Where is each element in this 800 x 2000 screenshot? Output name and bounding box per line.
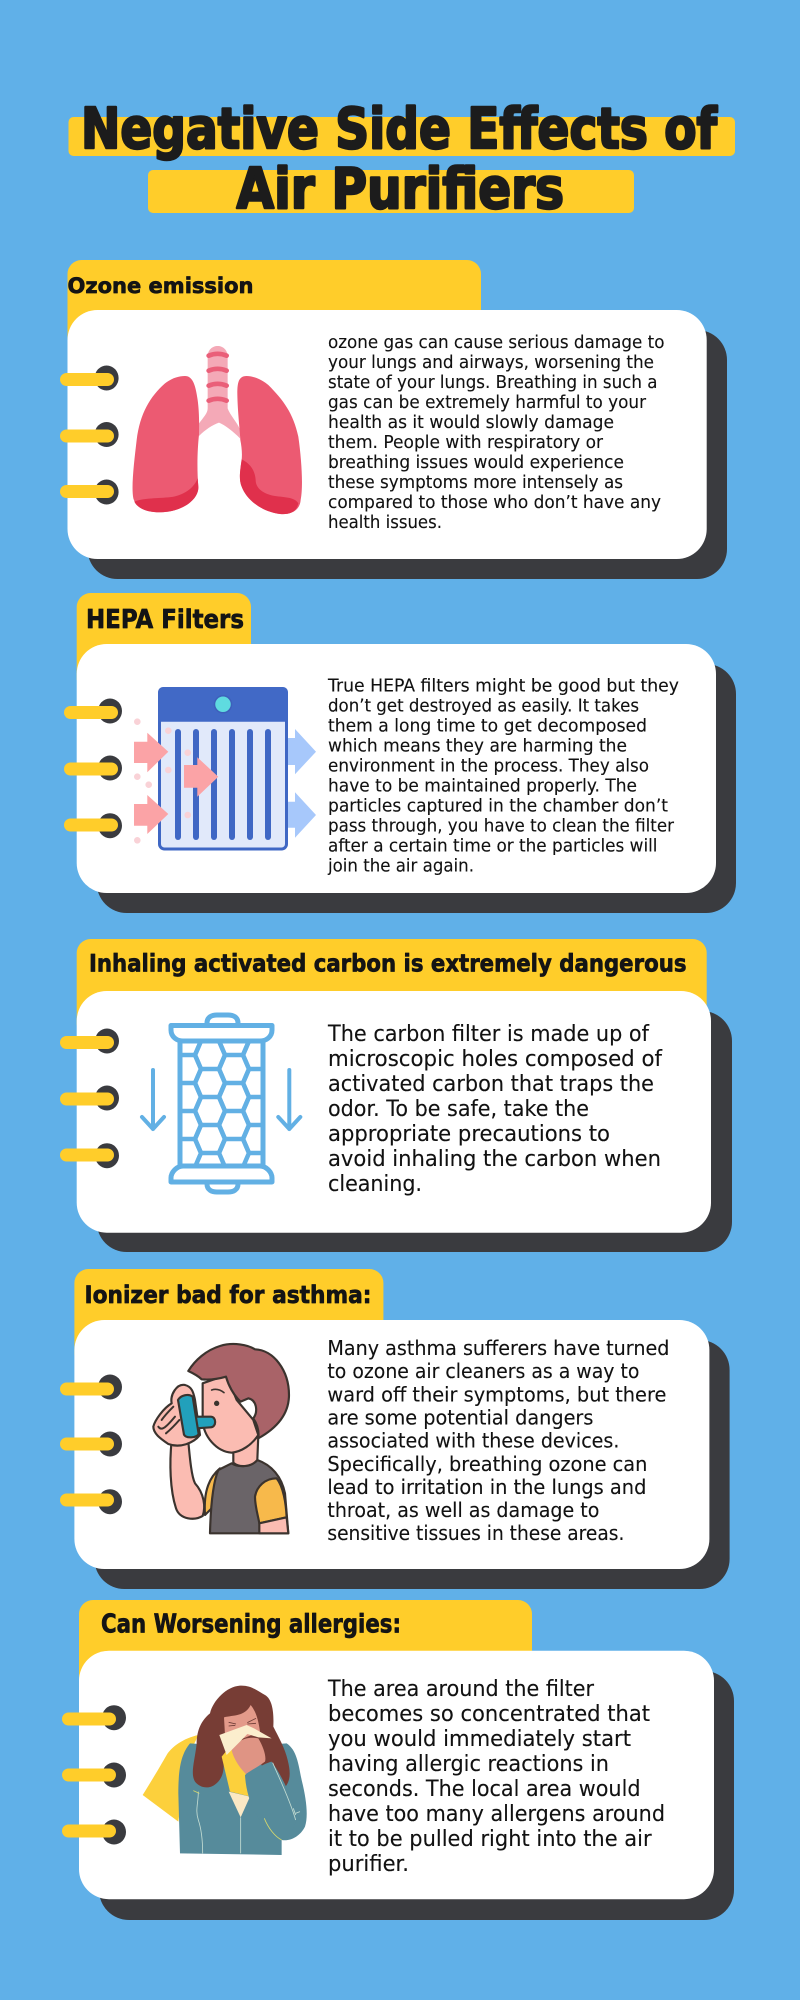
tab: ionizer heading: Ionizer bad for asthma: bbox=[84, 1281, 372, 1309]
tab: allergies heading: Can Worsening allergies: bbox=[101, 1610, 401, 1640]
text: ozone description: health issues. bbox=[328, 513, 442, 533]
text: allergies description: The area around the filter bbox=[327, 1677, 595, 1702]
text: ozone description bbox=[328, 333, 664, 533]
text: HEPA description: after a certain time or the particles will bbox=[328, 836, 658, 856]
text: asthma description: lead to irritation in the lungs and bbox=[327, 1475, 646, 1499]
text: HEPA description: have to be maintained properly. The bbox=[328, 776, 637, 796]
arrow: left downward flow bbox=[142, 1070, 164, 1129]
text: HEPA description: them a long time to get decomposed bbox=[328, 716, 647, 736]
text: asthma description: to ozone air cleaners as a way to bbox=[327, 1359, 639, 1383]
tab: ozone emission heading: Ozone emission bbox=[68, 274, 254, 298]
spiral binding rings bbox=[64, 698, 122, 838]
text: carbon description: appropriate precautions to bbox=[328, 1122, 610, 1147]
icon: lungs bbox=[133, 346, 302, 514]
title: Air Purifiers bbox=[236, 157, 564, 222]
text: asthma description: sensitive tissues in these areas. bbox=[327, 1521, 624, 1545]
text: carbon description: activated carbon that traps the bbox=[328, 1072, 654, 1097]
tab: allergies heading bbox=[79, 1600, 532, 1685]
tab: activated carbon heading bbox=[77, 939, 707, 1025]
text: ozone description: state of your lungs. Breathing in such a bbox=[328, 373, 658, 393]
arrow: right downward flow bbox=[278, 1070, 300, 1129]
text: HEPA description: particles captured in the chamber don’t bbox=[328, 796, 668, 816]
panel: worsening allergies bbox=[62, 1600, 734, 1920]
spiral binding rings bbox=[62, 1705, 126, 1844]
title bbox=[68, 97, 735, 222]
text: asthma description: ward off their symptoms, but there bbox=[327, 1382, 666, 1406]
text: carbon description: The carbon filter is made up of bbox=[327, 1022, 650, 1047]
text: HEPA description: environment in the process. They also bbox=[328, 756, 649, 776]
text: asthma description: associated with these devices. bbox=[327, 1429, 619, 1453]
text: allergies description: have too many allergens around bbox=[328, 1802, 665, 1827]
text: allergies description: having allergic reactions in bbox=[328, 1752, 609, 1777]
text: ozone description: them. People with respiratory or bbox=[328, 433, 604, 453]
icon: person using inhaler bbox=[153, 1344, 289, 1533]
tab: activated carbon heading: Inhaling activated carbon is extremely dangerous bbox=[89, 950, 686, 978]
text: asthma description: throat, as well as damage to bbox=[327, 1498, 599, 1522]
tab: HEPA filters heading: HEPA Filters bbox=[86, 605, 244, 635]
tab: HEPA filters heading bbox=[77, 593, 251, 680]
text: allergies description: you would immediately start bbox=[328, 1727, 631, 1752]
panel: HEPA filters bbox=[64, 593, 736, 913]
text: ozone description: your lungs and airways, worsening the bbox=[328, 353, 654, 373]
panel: ionizer and asthma bbox=[60, 1269, 730, 1589]
text: carbon description bbox=[327, 1022, 663, 1197]
text: ozone description: compared to those who don’t have any bbox=[328, 493, 661, 513]
text: carbon description: odor. To be safe, take the bbox=[328, 1097, 589, 1122]
text: HEPA description: which means they are harming the bbox=[328, 736, 627, 756]
text: allergies description: becomes so concentrated that bbox=[328, 1702, 650, 1727]
text: HEPA description: join the air again. bbox=[327, 856, 474, 876]
spiral binding rings bbox=[60, 1028, 119, 1168]
text: carbon description: cleaning. bbox=[328, 1172, 422, 1197]
tab: ozone emission heading bbox=[68, 260, 481, 345]
spiral binding rings bbox=[60, 1374, 122, 1514]
text: asthma description bbox=[327, 1336, 669, 1545]
text: asthma description: are some potential dangers bbox=[327, 1406, 593, 1430]
text: ozone description: gas can be extremely harmful to your bbox=[328, 393, 647, 413]
spiral binding rings bbox=[60, 366, 119, 504]
tab: ionizer heading bbox=[74, 1269, 383, 1355]
panel: activated carbon bbox=[60, 939, 732, 1252]
text: HEPA description: True HEPA filters might be good but they bbox=[327, 676, 679, 696]
icon: woman sneezing into tissue bbox=[143, 1686, 307, 1855]
text: ozone description: these symptoms more intensely as bbox=[328, 473, 623, 493]
text: allergies description: seconds. The local area would bbox=[328, 1777, 640, 1802]
panel: ozone emission bbox=[60, 260, 727, 579]
icon: HEPA filter with air flow arrows bbox=[134, 687, 316, 849]
text: HEPA description: don’t get destroyed as easily. It takes bbox=[328, 696, 639, 716]
text: ozone description: ozone gas can cause serious damage to bbox=[328, 333, 664, 353]
text: asthma description: Many asthma sufferers have turned bbox=[327, 1336, 669, 1360]
text: HEPA description: pass through, you have to clean the filter bbox=[328, 816, 675, 836]
text: allergies description bbox=[327, 1677, 665, 1877]
text: carbon description: avoid inhaling the carbon when bbox=[328, 1147, 661, 1172]
text: ozone description: health as it would slowly damage bbox=[328, 413, 614, 433]
text: allergies description: purifier. bbox=[328, 1852, 409, 1877]
text: carbon description: microscopic holes composed of bbox=[328, 1047, 663, 1072]
text: HEPA description bbox=[327, 676, 679, 876]
text: allergies description: it to be pulled right into the air bbox=[328, 1827, 652, 1852]
icon: activated carbon filter bbox=[142, 1015, 300, 1192]
text: ozone description: breathing issues would experience bbox=[328, 453, 624, 473]
text: asthma description: Specifically, breathing ozone can bbox=[327, 1452, 647, 1476]
